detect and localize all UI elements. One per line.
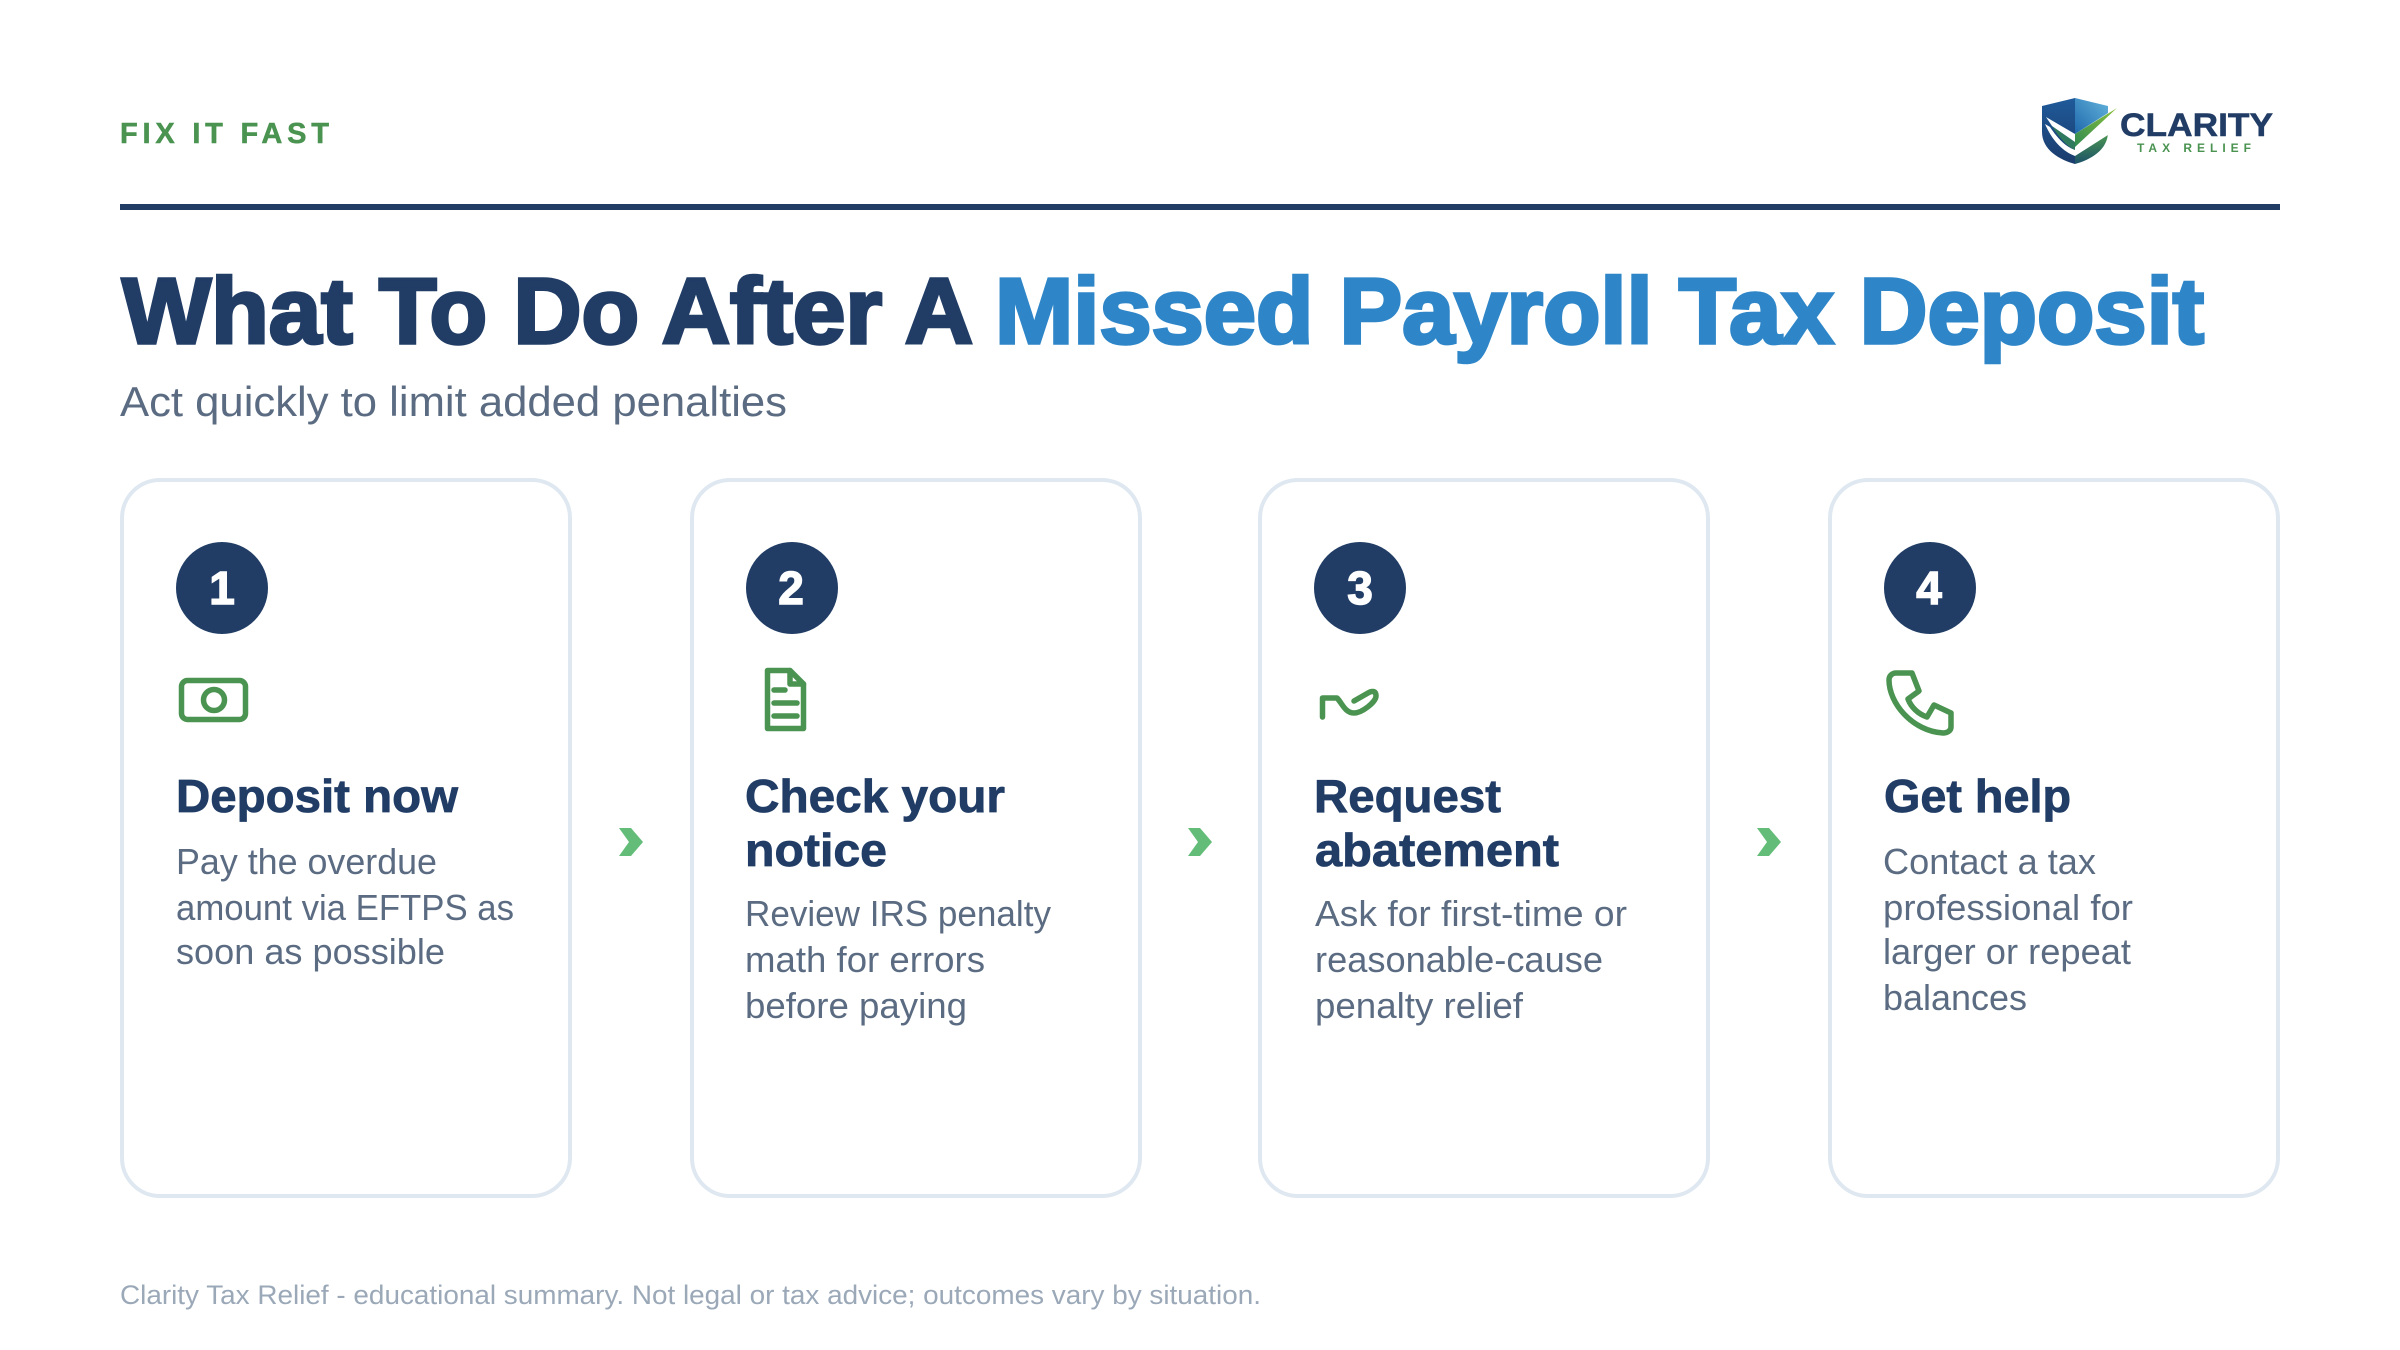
arrow 1	[619, 828, 643, 856]
step number 3	[1314, 542, 1406, 634]
heading: request abatement: abatement	[1315, 824, 1559, 876]
step number 2: 2	[778, 562, 804, 614]
body text: soon as possible	[176, 931, 445, 972]
heading: check your notice: Check your	[745, 770, 1005, 822]
heading: check your notice	[745, 770, 1005, 876]
header rule	[120, 204, 2280, 210]
title	[122, 259, 2204, 363]
logo shield	[2042, 98, 2117, 164]
icon: phone	[1889, 673, 1951, 733]
heading: deposit now: Deposit now	[176, 770, 458, 822]
icon: document	[768, 670, 804, 728]
footer disclaimer: Clarity Tax Relief - educational summary. Not legal or tax advice; outcomes vary by situation.	[120, 1280, 1261, 1310]
panel: step 1 deposit now	[122, 480, 570, 1196]
body text	[1315, 893, 1627, 1026]
step number 2	[746, 542, 838, 634]
panel: step 2 check your notice	[692, 480, 1140, 1196]
body text: professional for	[1883, 887, 2133, 928]
body text: Pay the overdue	[176, 841, 437, 882]
icon: handshake	[1322, 691, 1376, 717]
body text: Ask for first-time or	[1315, 893, 1627, 934]
eyebrow label: FIX IT FAST	[120, 118, 329, 150]
icon: cash	[182, 680, 246, 720]
title: What To Do After A	[122, 259, 973, 363]
title: Missed Payroll Tax Deposit	[995, 259, 2204, 363]
arrow 2	[1188, 828, 1212, 856]
heading: check your notice: notice	[745, 824, 887, 876]
panel: step 3 request abatement	[1260, 480, 1708, 1196]
logo tagline: TAX RELIEF	[2137, 141, 2251, 155]
step number 1	[176, 542, 268, 634]
logo	[2042, 98, 2273, 164]
body text: penalty relief	[1315, 985, 1524, 1026]
step number 4: 4	[1916, 562, 1942, 614]
body text: before paying	[745, 985, 967, 1026]
step number 4	[1884, 542, 1976, 634]
step number 1: 1	[209, 562, 235, 614]
body text: larger or repeat	[1883, 931, 2131, 972]
body text: reasonable-cause	[1315, 939, 1603, 980]
body text	[176, 841, 514, 972]
body text: Contact a tax	[1883, 841, 2096, 882]
logo wordmark: CLARITY	[2120, 107, 2273, 143]
heading: request abatement	[1314, 770, 1559, 876]
panel: step 4 get help	[1830, 480, 2278, 1196]
step number 3: 3	[1347, 562, 1373, 614]
arrow 3	[1757, 828, 1781, 856]
heading: get help: Get help	[1884, 770, 2071, 822]
body text: Review IRS penalty	[745, 893, 1051, 934]
body text: amount via EFTPS as	[176, 887, 514, 928]
body text	[745, 893, 1051, 1026]
body text: math for errors	[745, 939, 985, 980]
body text	[1883, 841, 2133, 1018]
heading: request abatement: Request	[1314, 770, 1501, 822]
body text: balances	[1883, 977, 2027, 1018]
subtitle: Act quickly to limit added penalties	[120, 378, 787, 425]
